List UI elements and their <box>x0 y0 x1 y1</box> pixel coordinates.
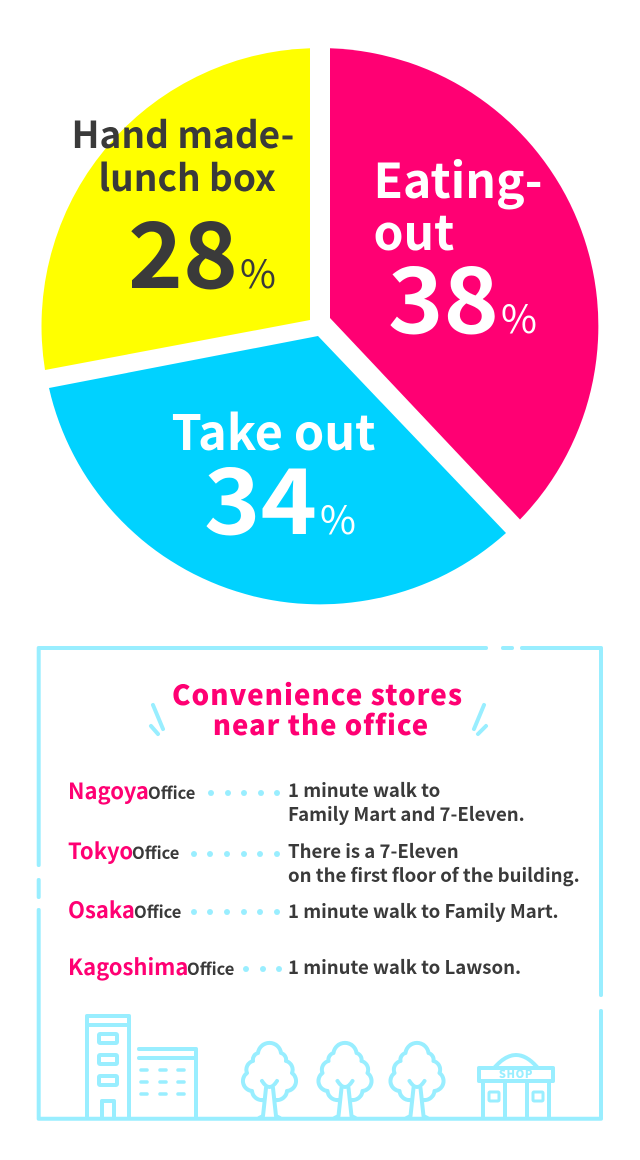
heading: Convenience stores <box>172 674 463 714</box>
row: Osaka: Osaka <box>68 893 135 925</box>
icon: office buildings <box>87 1016 196 1118</box>
row: Tokyo: on the first floor of the building. <box>288 861 580 888</box>
icon: shop: SHOP <box>499 1066 533 1082</box>
pie chart <box>42 48 598 604</box>
icon: left sparkle <box>151 705 163 734</box>
icon: shop <box>479 1055 553 1118</box>
slice: hand made lunch box 28%: 28 <box>128 183 238 315</box>
slice: eating-out 38%: Eating- <box>374 142 542 212</box>
row: Nagoya <box>68 774 525 827</box>
row: Osaka: Office <box>134 899 181 923</box>
slice: hand made lunch box 28%: lunch box <box>98 148 276 202</box>
row: Kagoshima <box>68 950 521 982</box>
slice: take out 34%: 34 <box>204 429 317 561</box>
icon: tree 2 <box>318 1043 372 1118</box>
slice: hand made lunch box 28%: Hand made- <box>72 105 294 159</box>
heading: near the office <box>213 703 429 743</box>
icon: tree 1 <box>243 1043 296 1118</box>
row: Kagoshima: Office <box>187 956 234 980</box>
panel border <box>39 648 601 1119</box>
row: Tokyo: Tokyo <box>68 834 133 866</box>
slice: take out 34%: % <box>320 490 356 546</box>
row: Kagoshima: Kagoshima <box>68 950 188 982</box>
slice: eating-out 38%: % <box>501 289 537 345</box>
slice: take out 34% <box>49 336 506 604</box>
row: Nagoya: Nagoya <box>68 774 149 806</box>
row: Nagoya: Family Mart and 7-Eleven. <box>288 800 525 827</box>
panel: convenience stores <box>39 648 601 1119</box>
slice: eating-out 38% <box>330 48 598 519</box>
row: Tokyo: There is a 7-Eleven <box>288 837 459 864</box>
icon: tree 3 <box>390 1043 444 1118</box>
heading <box>172 674 463 743</box>
slice: hand made lunch box 28%: % <box>240 244 276 300</box>
row: Tokyo <box>68 834 580 888</box>
row: Tokyo: Office <box>132 840 179 864</box>
row: Osaka <box>68 893 559 925</box>
row: Nagoya: 1 minute walk to <box>288 776 440 803</box>
slice: eating-out 38%: 38 <box>388 228 499 360</box>
slice: eating-out 38%: out <box>374 194 454 264</box>
row: Osaka: 1 minute walk to Family Mart. <box>288 897 559 924</box>
slice: hand made lunch box 28% <box>42 48 310 370</box>
row: Kagoshima: 1 minute walk to Lawson. <box>288 953 521 980</box>
slice: take out 34%: Take out <box>172 394 376 464</box>
row: Nagoya: Office <box>148 780 195 804</box>
icon: right sparkle <box>474 705 486 734</box>
